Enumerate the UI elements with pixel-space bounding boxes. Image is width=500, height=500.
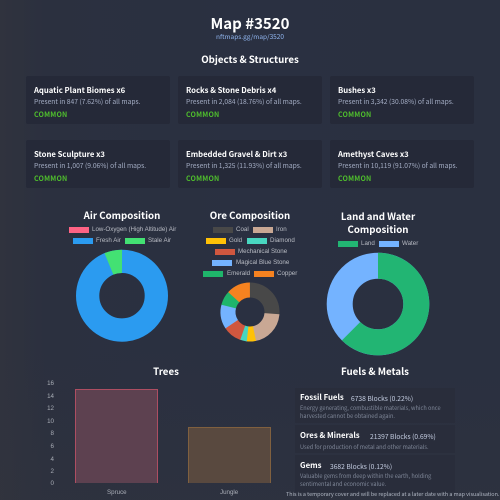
- legend: land and water: [338, 240, 418, 247]
- legend: air composition: Low-Oxygen (High Altitude) Air: [92, 226, 176, 233]
- row: ores and minerals: Ores & Minerals: [300, 430, 360, 441]
- bar chart: trees: 4: [51, 456, 54, 463]
- bar chart: trees: 6: [51, 443, 54, 450]
- card: bushes: Bushes x3: [338, 84, 376, 96]
- bar chart: trees: Jungle: [220, 489, 238, 496]
- heading: objects and structures: Objects & Structures: [201, 52, 299, 66]
- legend: ore composition: Coal: [236, 226, 249, 233]
- heading: ore composition: Ore Composition: [210, 208, 290, 222]
- row: fossil fuels: [295, 388, 455, 423]
- legend: air composition: Stale Air: [148, 237, 171, 244]
- legend: ore composition: Mechanical Stone: [238, 248, 287, 255]
- bar chart: trees: 2: [51, 468, 54, 475]
- legend: ore composition: Diamond: [270, 237, 295, 244]
- card: embedded gravel and dirt: Present in 1,325 (11.93%) of all maps.: [186, 160, 302, 170]
- card: stone sculpture: [26, 140, 170, 188]
- card: embedded gravel and dirt: COMMON: [186, 174, 219, 184]
- title: Map #3520: [210, 13, 289, 34]
- footer note: This is a temporary cover and will be replaced at a later date with a map visualisation.: [286, 490, 499, 498]
- row: fossil fuels: harvested cannot be obtained again.: [300, 412, 395, 420]
- legend: ore composition: [203, 226, 298, 277]
- card: stone sculpture: Present in 1,007 (9.06%) of all maps.: [34, 160, 146, 170]
- heading: air composition: Air Composition: [84, 208, 160, 222]
- heading: land and water composition: Land and Water Composition: [341, 208, 415, 236]
- card: embedded gravel and dirt: Embedded Gravel & Dirt x3: [186, 148, 287, 160]
- row: gems: sentimental and economic value.: [300, 480, 386, 488]
- legend: air composition: [69, 226, 176, 244]
- bar chart: trees: [47, 380, 271, 496]
- legend: ore composition: Gold: [229, 237, 242, 244]
- legend: land and water: Land: [361, 240, 375, 247]
- legend: ore composition: Copper: [277, 270, 297, 277]
- row: fossil fuels: Energy generating, combustible materials, which once: [300, 404, 441, 412]
- legend: ore composition: Magical Blue Stone: [236, 259, 289, 266]
- row: fossil fuels: 6738 Blocks (0.22%): [351, 393, 413, 403]
- row: gems: [295, 455, 455, 492]
- row: ores and minerals: Used for production of metal and other materials.: [300, 442, 429, 450]
- heading: fuels and metals: Fuels & Metals: [341, 364, 409, 378]
- row: gems: Valuable gems from deep within the earth, holding: [300, 472, 431, 480]
- bar chart: trees: 12: [47, 405, 54, 412]
- row: ores and minerals: 21397 Blocks (0.69%): [370, 431, 436, 441]
- row: ores and minerals: [295, 425, 455, 453]
- bar chart: trees: 10: [47, 418, 54, 425]
- row: gems: Gems: [300, 460, 322, 471]
- bar chart: trees: 8: [51, 430, 54, 437]
- map link: nftmaps.gg/map/3520: [216, 31, 284, 41]
- card: amethyst caves: Amethyst Caves x3: [338, 148, 409, 160]
- card: aquatic plant biomes: COMMON: [34, 110, 67, 120]
- card: stone sculpture: COMMON: [34, 174, 67, 184]
- bar chart: trees: Spruce: [107, 489, 127, 496]
- bar chart: trees: 16: [47, 380, 54, 387]
- card: rocks and stone debris: [178, 76, 322, 124]
- legend: air composition: Fresh Air: [96, 237, 121, 244]
- legend: land and water: Water: [402, 240, 418, 247]
- card: stone sculpture: Stone Sculpture x3: [34, 148, 105, 160]
- bar chart: trees: 14: [47, 393, 54, 400]
- card: bushes: COMMON: [338, 110, 371, 120]
- card: aquatic plant biomes: Aquatic Plant Biomes x6: [34, 84, 125, 96]
- card: aquatic plant biomes: [26, 76, 170, 124]
- card: amethyst caves: COMMON: [338, 174, 371, 184]
- card: aquatic plant biomes: Present in 847 (7.62%) of all maps.: [34, 96, 140, 106]
- card: rocks and stone debris: Rocks & Stone Debris x4: [186, 84, 276, 96]
- legend: ore composition: Iron: [276, 226, 287, 233]
- bar chart: trees: 0: [51, 480, 54, 487]
- card: amethyst caves: Present in 10,119 (91.07%) of all maps.: [338, 160, 457, 170]
- card: amethyst caves: [330, 140, 474, 188]
- card: embedded gravel and dirt: [178, 140, 322, 188]
- card: bushes: Present in 3,342 (30.08%) of all maps.: [338, 96, 454, 106]
- bar: spruce: [75, 389, 158, 483]
- row: fossil fuels: Fossil Fuels: [300, 392, 344, 403]
- card: rocks and stone debris: Present in 2,084 (18.76%) of all maps.: [186, 96, 302, 106]
- row: gems: 3682 Blocks (0.12%): [330, 461, 392, 471]
- legend: ore composition: Emerald: [227, 270, 250, 277]
- heading: trees: Trees: [153, 364, 179, 378]
- bar: jungle: [188, 427, 271, 483]
- card: bushes: [330, 76, 474, 124]
- card: rocks and stone debris: COMMON: [186, 110, 219, 120]
